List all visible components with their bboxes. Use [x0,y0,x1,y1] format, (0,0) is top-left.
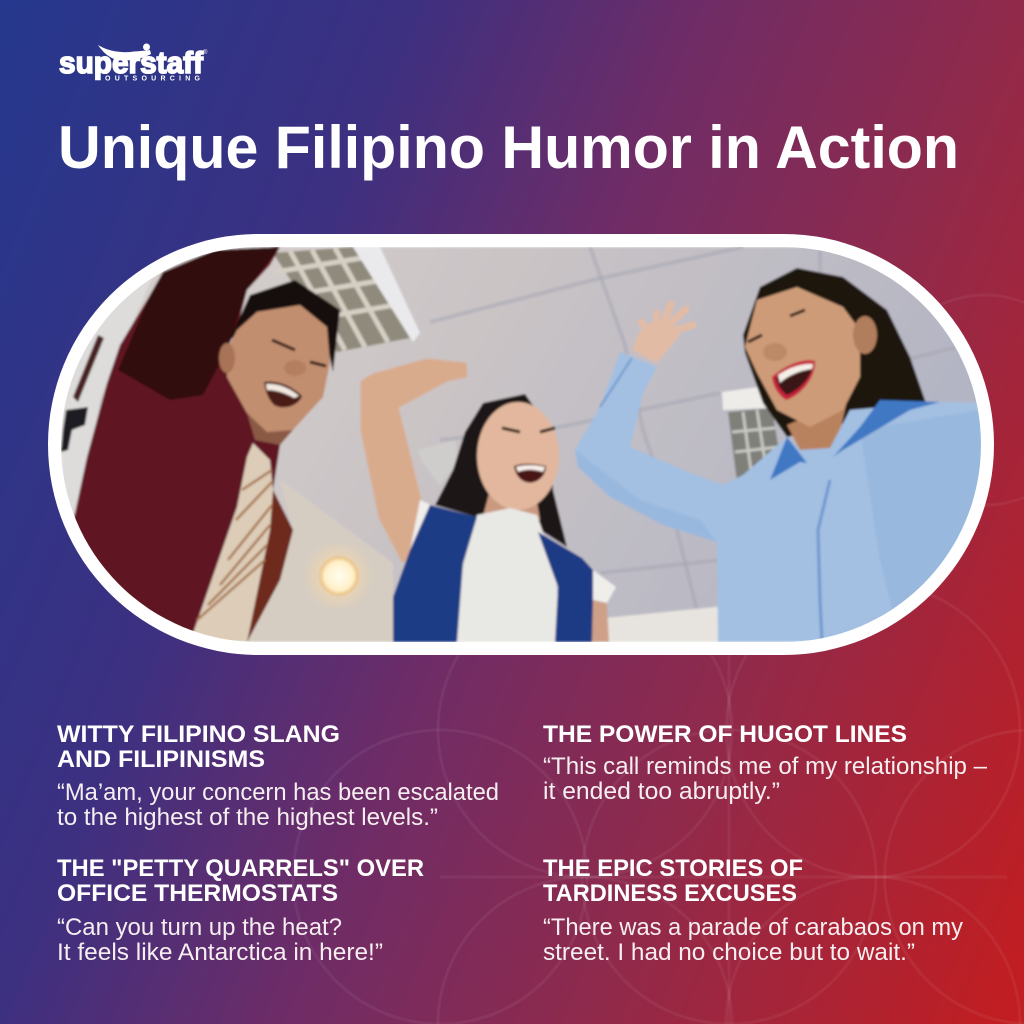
middle woman [362,360,616,642]
quote line 2: It feels like Antarctica in here!” [57,939,383,966]
wall lower right [605,606,725,642]
right woman eyes [748,310,805,342]
right woman [575,268,985,642]
wall dark strip [73,335,104,402]
section: petty quarrels [57,855,424,966]
logo dot [143,44,150,50]
quote: “There was a parade of carabaos on my [543,914,963,941]
heading: WITTY FILIPINO SLANG [57,721,340,748]
middle woman eyes [502,428,555,432]
left wall [62,279,151,516]
logo tagline: OUTSOURCING [105,76,201,82]
heading line 2: OFFICE THERMOSTATS [57,880,338,907]
ceiling grid lines [430,247,985,610]
middle woman teeth [516,465,545,472]
middle woman arm [362,360,466,561]
right woman neck [787,400,847,455]
man tie [190,443,273,642]
section: hugot lines [543,721,988,805]
middle woman vest right [538,532,593,642]
section: witty Filipino slang [57,721,499,831]
right woman face [745,287,860,427]
wall camera [61,407,88,452]
man [61,247,340,642]
heading line 2: TARDINESS EXCUSES [543,880,797,907]
right woman shirt [575,352,985,642]
section: tardiness excuses [543,855,963,966]
small vent behind middle woman [420,441,457,483]
right woman mouth [772,360,815,400]
man tie stripes [197,470,272,620]
photo frame [48,234,994,655]
right woman nose [763,343,787,361]
fingers [641,304,693,330]
logo registered mark: ® [203,49,208,56]
heading: THE POWER OF HUGOT LINES [543,721,907,748]
right woman back hair [743,268,926,437]
right woman ear [853,316,877,354]
middle woman right sleeve [593,570,616,603]
quote: “This call reminds me of my relationship – [543,753,988,780]
man face [227,305,330,432]
quote: “Can you turn up the heat? [57,914,342,941]
man ear [219,343,235,373]
man teeth [266,384,299,398]
lamp glow [310,548,366,604]
middle woman left sleeve [410,500,431,550]
man mouth [264,382,302,407]
man sleeve shadow [118,247,280,400]
ceiling [96,247,976,618]
middle woman vest left [393,505,477,642]
quote line 2: it ended too abruptly.” [543,778,780,805]
right ceiling vent [722,386,782,482]
middle woman hair [435,394,567,547]
photo: three laughing colleagues [61,247,985,642]
man eyes [272,340,326,366]
man nose [284,360,306,376]
man neck shadow [247,413,293,445]
quote line 2: to the highest of the highest levels.” [57,804,438,831]
middle woman neck [482,490,540,520]
right woman shirt shading [575,410,985,642]
title: Unique Filipino Humor in Action [58,114,959,181]
wall lamp bulb [320,556,358,596]
man shirt [74,247,282,632]
background arc pattern [293,295,1024,1024]
back wall lower [247,480,393,642]
palm [632,318,680,363]
right woman collar [770,400,940,480]
heading line 2: AND FILIPINISMS [57,746,265,773]
right woman hand [632,304,693,363]
man shirt side panel [250,496,292,632]
right woman placket [818,480,830,642]
middle woman top [457,508,560,642]
heading: THE "PETTY QUARRELS" OVER [57,855,424,882]
logo swoosh [98,45,151,60]
logo wordmark: superstaff [59,45,204,80]
quote line 2: street. I had no choice but to wait.” [543,939,915,966]
right woman sleeve seam [600,358,632,407]
middle woman right arm [592,600,609,642]
right woman mouth interior [776,365,813,395]
logo [59,44,208,82]
ceiling light fixture [273,247,420,352]
right woman teeth [778,364,813,383]
quote: “Ma’am, your concern has been escalated [57,779,499,806]
man hair [228,280,340,372]
middle woman mouth [514,464,546,483]
middle woman face [477,402,559,510]
heading: THE EPIC STORIES OF [543,855,803,882]
